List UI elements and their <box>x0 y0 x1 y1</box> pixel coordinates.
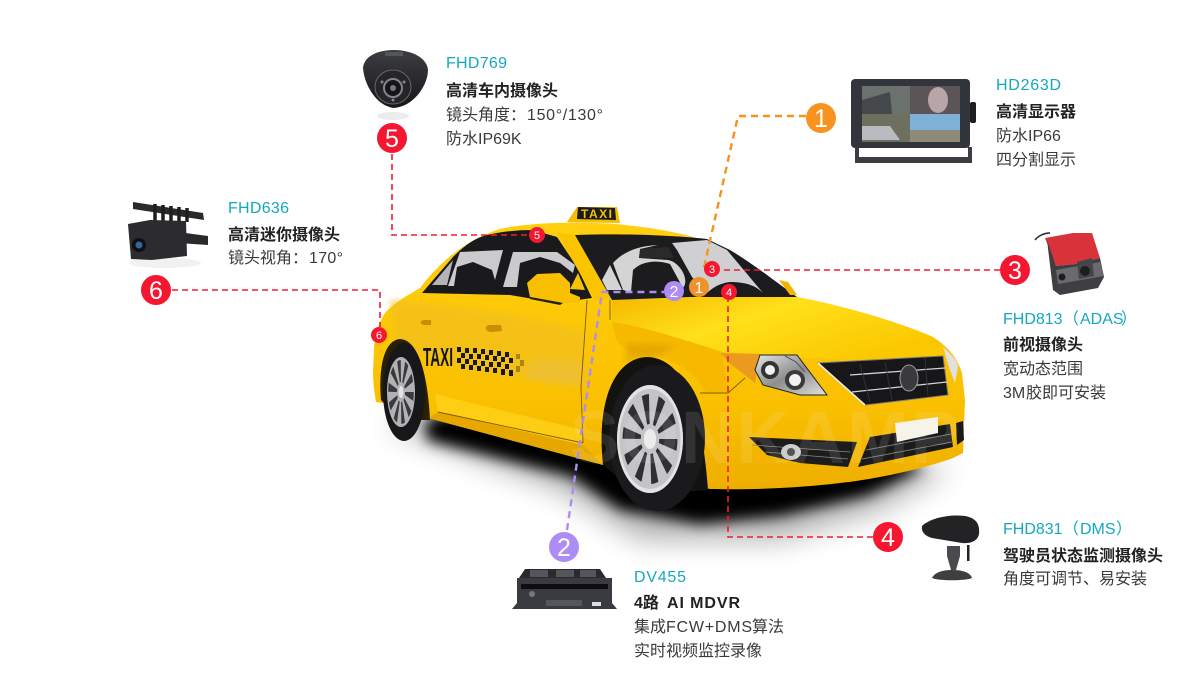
marker 4 large: 4 <box>881 524 895 552</box>
marker 1 small <box>689 277 709 297</box>
model: FHD636 <box>228 200 289 217</box>
hood highlight <box>612 297 944 359</box>
spec: 四分割显示 <box>996 151 1076 169</box>
spec: 防水IP69K <box>446 130 522 148</box>
front wheel arch <box>602 357 708 495</box>
rear wheel <box>383 343 425 441</box>
line 5 <box>392 154 530 235</box>
spec: FCW+DMS <box>666 619 752 636</box>
model: FHD769 <box>446 55 507 72</box>
ground shadow <box>385 400 950 540</box>
spec: 镜头角度： <box>446 107 526 124</box>
door seams and handles <box>421 300 745 443</box>
line 3 <box>720 269 1000 271</box>
spec: 角度可调节、易安装 <box>1003 570 1147 588</box>
model: ） <box>1116 520 1132 538</box>
model: HD263D <box>996 77 1061 94</box>
indicator <box>721 353 760 383</box>
spec: 集成 <box>634 619 666 636</box>
icon: mini camera <box>128 202 208 268</box>
marker 2 small: 2 <box>670 284 679 301</box>
product name: 驾驶员状态监测摄像头 <box>1003 546 1163 565</box>
icon: dome camera <box>363 50 428 120</box>
lower grille <box>749 421 964 467</box>
side mirror <box>527 273 580 303</box>
marker 6 small <box>371 327 387 343</box>
product name: 4路 <box>634 595 659 612</box>
connector lines <box>172 116 1000 537</box>
rear seat glass <box>432 260 453 285</box>
product text: FHD769 <box>446 55 603 148</box>
marker 2 large: 2 <box>557 534 571 562</box>
model: DV455 <box>634 569 686 586</box>
line 4 <box>728 300 873 537</box>
license plate <box>895 417 938 442</box>
product text: FHD813 <box>1003 310 1137 402</box>
windshield <box>575 234 797 300</box>
model: （ <box>1063 520 1079 538</box>
marker 6 large <box>141 275 171 305</box>
product name: 高清迷你摄像头 <box>228 225 340 244</box>
watermark: SONKAMP <box>570 396 960 479</box>
product text: DV455 <box>634 569 784 660</box>
marker 5 large: 5 <box>385 125 399 153</box>
spec: 宽动态范围 <box>1003 360 1083 378</box>
product name: AI MDVR <box>667 595 740 612</box>
marker 2 large <box>549 532 579 562</box>
product name: 高清显示器 <box>996 102 1076 121</box>
model: （ <box>1063 310 1079 328</box>
front wheel <box>609 365 705 511</box>
marker 4 small: 4 <box>726 287 732 299</box>
marker 3 small <box>704 261 720 277</box>
headlight <box>755 355 827 395</box>
line 1 <box>703 116 806 272</box>
A pillar <box>557 233 612 300</box>
product name: 高清车内摄像头 <box>446 81 558 100</box>
icon: ADAS camera <box>1035 233 1104 295</box>
roof taxi sign: TAXI <box>581 207 612 221</box>
roof taxi sign <box>567 207 620 223</box>
wiper mirror tab <box>779 280 797 295</box>
spec: 镜头视角： <box>228 250 308 267</box>
product name: 前视摄像头 <box>1003 335 1083 354</box>
icon: MDVR recorder <box>512 569 617 609</box>
spec: 实时视频监控录像 <box>634 642 762 660</box>
line 2 <box>567 292 664 530</box>
product text: FHD831 <box>1003 520 1163 588</box>
fender shading <box>612 322 728 392</box>
marker 3 large: 3 <box>1008 257 1022 285</box>
spec: 算法 <box>752 617 784 636</box>
spec: 170° <box>309 250 343 267</box>
marker 4 large <box>873 522 903 552</box>
marker 3 small: 3 <box>709 264 715 276</box>
spec: 防水IP66 <box>996 127 1061 145</box>
marker 6 large: 6 <box>149 277 163 305</box>
marker 1 large <box>806 103 836 133</box>
spec: 胶即可安装 <box>1026 384 1106 402</box>
model: DMS <box>1080 521 1116 538</box>
marker 1 large: 1 <box>814 105 828 133</box>
icon: DMS camera <box>922 515 979 580</box>
rear wheel arch <box>380 339 430 420</box>
model: FHD831 <box>1003 521 1063 538</box>
door checker stripe <box>457 347 524 376</box>
car body <box>373 223 965 489</box>
side windows <box>422 230 592 303</box>
product text: HD263D <box>996 77 1076 169</box>
spec: 3M <box>1003 385 1025 402</box>
marker 5 small: 5 <box>534 230 540 242</box>
spec: 150°/130° <box>527 107 603 124</box>
marker 3 large <box>1000 255 1030 285</box>
marker 4 small <box>721 284 737 300</box>
model: ） <box>1121 310 1137 328</box>
marker 5 large <box>377 123 407 153</box>
door shading <box>390 300 586 385</box>
marker 6 small: 6 <box>376 330 382 342</box>
line 6 <box>172 290 380 327</box>
windshield interior glass <box>602 245 685 292</box>
marker 1 small: 1 <box>695 280 704 297</box>
icon: monitor <box>851 79 976 163</box>
front grille <box>818 347 958 405</box>
model: FHD813 <box>1003 311 1063 328</box>
marker 5 small <box>529 227 545 243</box>
model: ADAS <box>1080 311 1124 328</box>
door TAXI lettering: TAXI <box>423 342 453 372</box>
product text: FHD636 <box>228 200 343 267</box>
taxi car <box>373 207 965 540</box>
marker 2 small <box>664 281 684 301</box>
